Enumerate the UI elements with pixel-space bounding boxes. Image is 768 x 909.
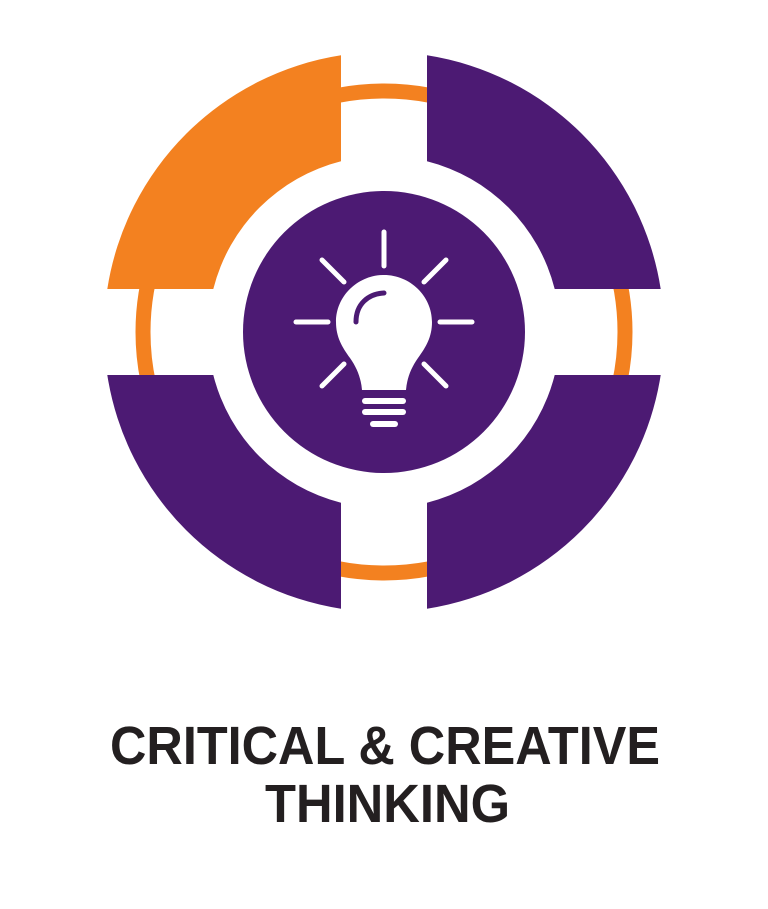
bulb glass xyxy=(336,275,432,390)
segment: bottom-left purple xyxy=(107,375,341,609)
center purple disc xyxy=(243,191,525,473)
title: THINKING xyxy=(265,774,510,834)
orange thin ring xyxy=(143,91,625,573)
icon: light bulb xyxy=(296,232,472,424)
rays xyxy=(296,232,472,386)
segment: bottom-right purple xyxy=(427,375,661,609)
title xyxy=(110,716,660,834)
emblem: ring with quadrants xyxy=(107,55,661,609)
segment: top-right purple xyxy=(427,55,661,289)
base lines xyxy=(365,401,403,424)
highlight xyxy=(356,293,384,322)
title: CRITICAL & CREATIVE xyxy=(110,716,660,776)
segment: top-left orange xyxy=(107,55,341,289)
